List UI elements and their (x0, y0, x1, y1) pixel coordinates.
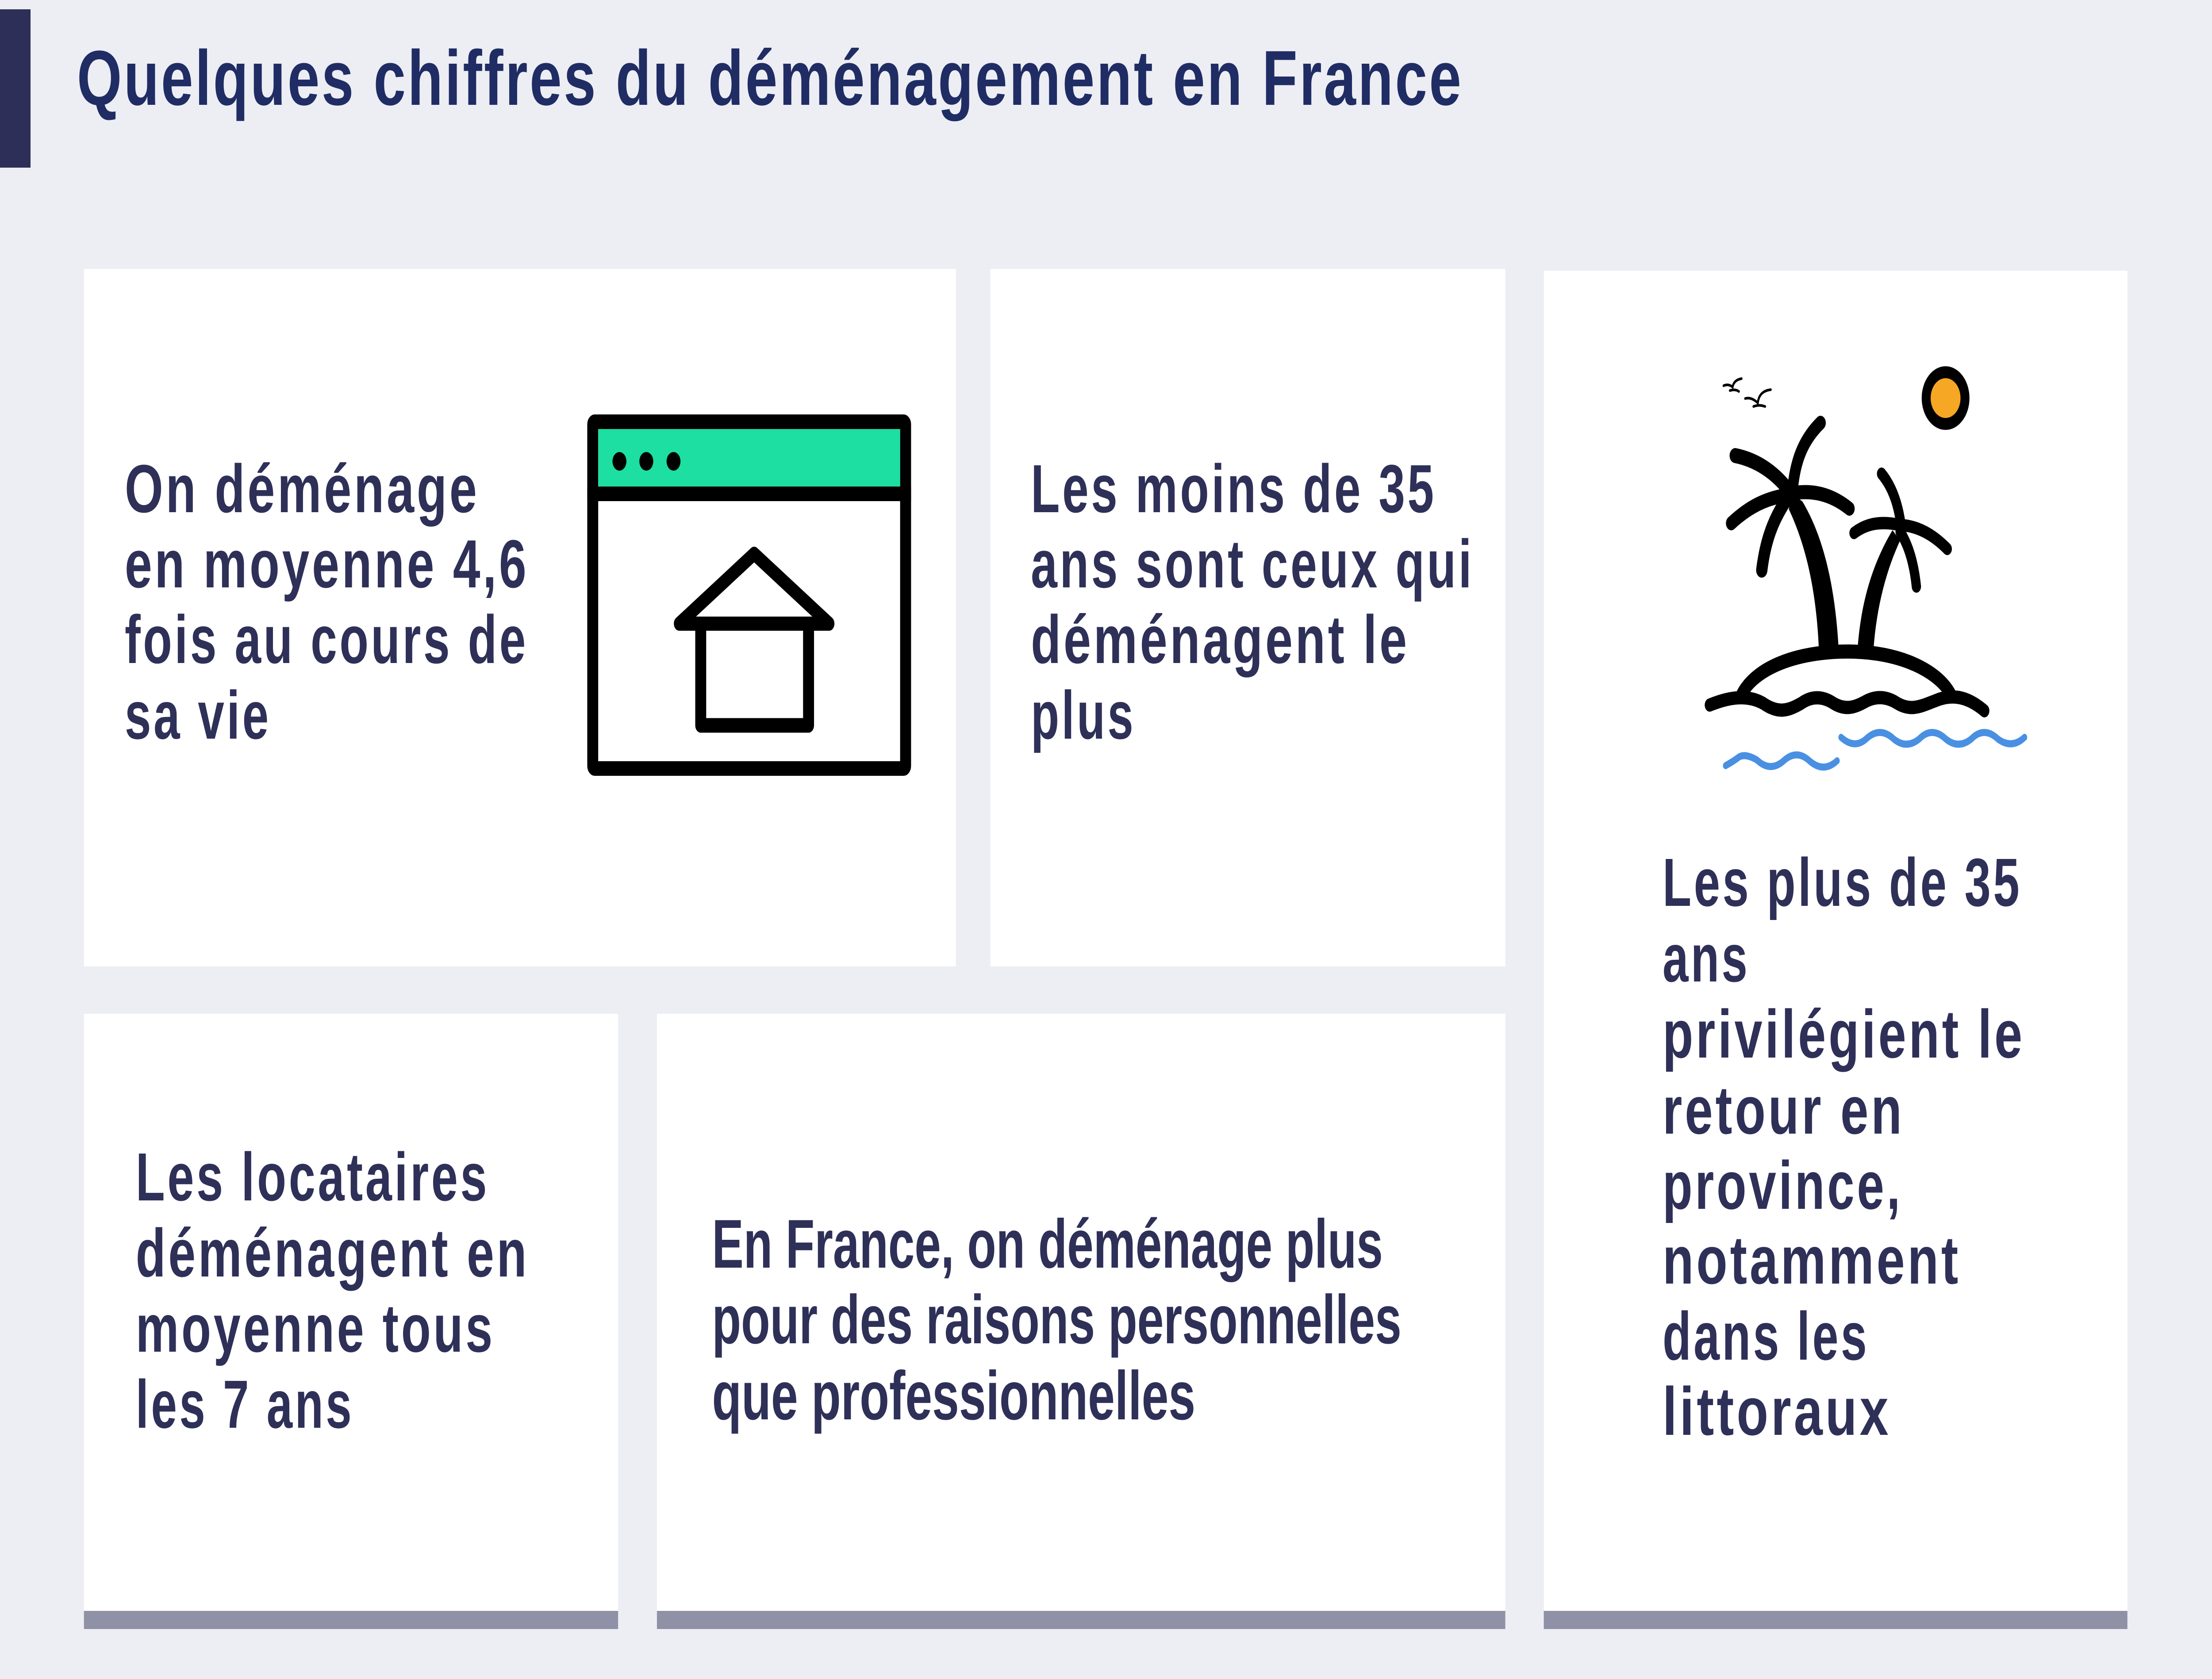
text: personal reasons (712, 1206, 1402, 1434)
text: under 35: Les moins de 35 (1031, 451, 1436, 527)
text: tenants: Les locataires (136, 1139, 489, 1215)
text: over 35: retour en (1663, 1072, 1905, 1148)
text: under 35: déménagent le (1031, 602, 1409, 678)
icon: birds (1724, 379, 1771, 406)
text: under 35: ans sont ceux qui (1031, 526, 1474, 602)
text: average number of moves: sa vie (125, 677, 271, 753)
text: over 35 (1663, 844, 2025, 1449)
text: tenants: les 7 ans (136, 1366, 354, 1442)
text: tenants: moyenne tous (136, 1290, 495, 1366)
icon: blue waves (1726, 732, 2024, 767)
panel: over 35 (1544, 271, 2128, 1629)
text: over 35: littoraux (1663, 1373, 1891, 1449)
text: over 35: dans les (1663, 1298, 1869, 1374)
text: tenants (136, 1139, 529, 1442)
text: over 35: ans (1663, 920, 1750, 996)
text: over 35: notamment (1663, 1222, 1961, 1298)
text: average number of moves (125, 451, 529, 753)
header accent bar (0, 9, 31, 168)
text: personal reasons: En France, on déménage plus (712, 1206, 1383, 1283)
panel: under 35 (991, 269, 1505, 966)
icon: sun (1922, 366, 1970, 430)
text: over 35: province, (1663, 1147, 1903, 1223)
text: personal reasons: pour des raisons personnelles (712, 1281, 1402, 1358)
icon: palm trees (1731, 423, 1947, 650)
panel: personal reasons (657, 1014, 1505, 1629)
text: average number of moves: en moyenne 4,6 (125, 526, 529, 602)
text: average number of moves: fois au cours de (125, 602, 528, 678)
text: tenants: déménagent en (136, 1215, 529, 1291)
icon: palm island with sun (1710, 366, 2024, 767)
icon: browser window with house (587, 422, 911, 769)
text: over 35: Les plus de 35 (1663, 844, 2022, 920)
panel: average number of moves (84, 269, 956, 966)
text: under 35: plus (1031, 677, 1136, 753)
panel: tenants (84, 1014, 618, 1629)
text: average number of moves: On déménage (125, 451, 480, 527)
text: over 35: privilégient le (1663, 996, 2025, 1072)
icon: island and black wave (1710, 652, 1985, 711)
text: under 35 (1031, 451, 1474, 753)
text: personal reasons: que professionnelles (712, 1357, 1195, 1434)
title: Quelques chiffres du déménagement en France (77, 34, 1463, 121)
